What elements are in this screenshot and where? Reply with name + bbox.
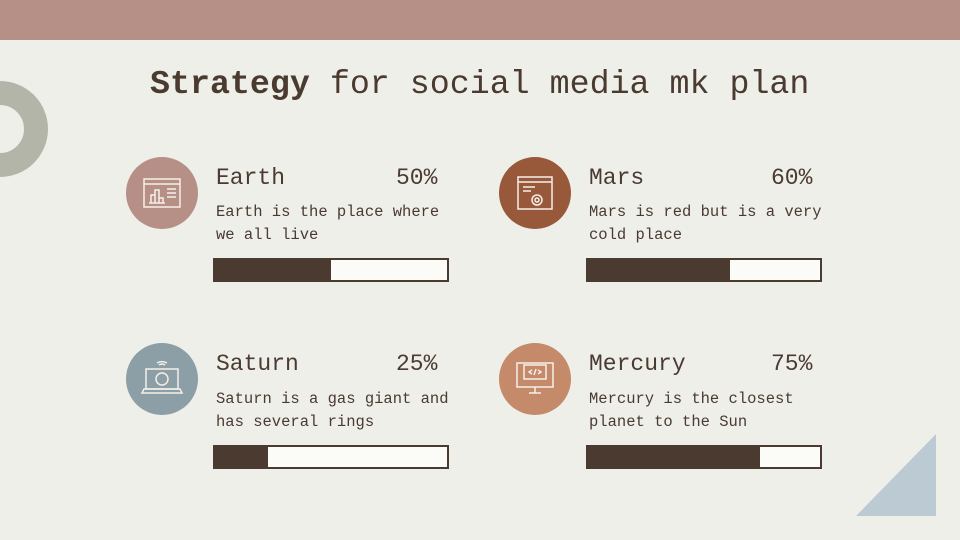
progress bar [213, 445, 449, 469]
description: Earth is the place where we all live [216, 203, 439, 244]
panel: Mars [499, 157, 822, 282]
progress bar [586, 445, 822, 469]
percentage: 75% [771, 351, 812, 377]
percentage: 25% [396, 351, 437, 377]
heading: Mars [589, 165, 644, 191]
description: Mars is red but is a very cold place [589, 203, 822, 244]
percentage: 60% [771, 165, 812, 191]
icon: laptop money [126, 343, 198, 415]
heading: Saturn [216, 351, 299, 377]
progress bar [213, 258, 449, 282]
icon: code monitor [499, 343, 571, 415]
title: Strategy for social media mk plan [150, 65, 809, 103]
decorative triangle [856, 434, 936, 516]
top band [0, 0, 960, 40]
panel: Earth [126, 157, 449, 282]
description: Saturn is a gas giant and has several rings [216, 390, 449, 431]
heading: Earth [216, 165, 285, 191]
icon: dashboard chart [126, 157, 198, 229]
description: Mercury is the closest planet to the Sun [589, 390, 794, 431]
percentage: 50% [396, 165, 437, 191]
progress bar [586, 258, 822, 282]
decorative ring [0, 81, 48, 177]
panel: Saturn [126, 343, 449, 469]
icon: settings window [499, 157, 571, 229]
heading: Mercury [589, 351, 686, 377]
panel: Mercury [499, 343, 822, 469]
